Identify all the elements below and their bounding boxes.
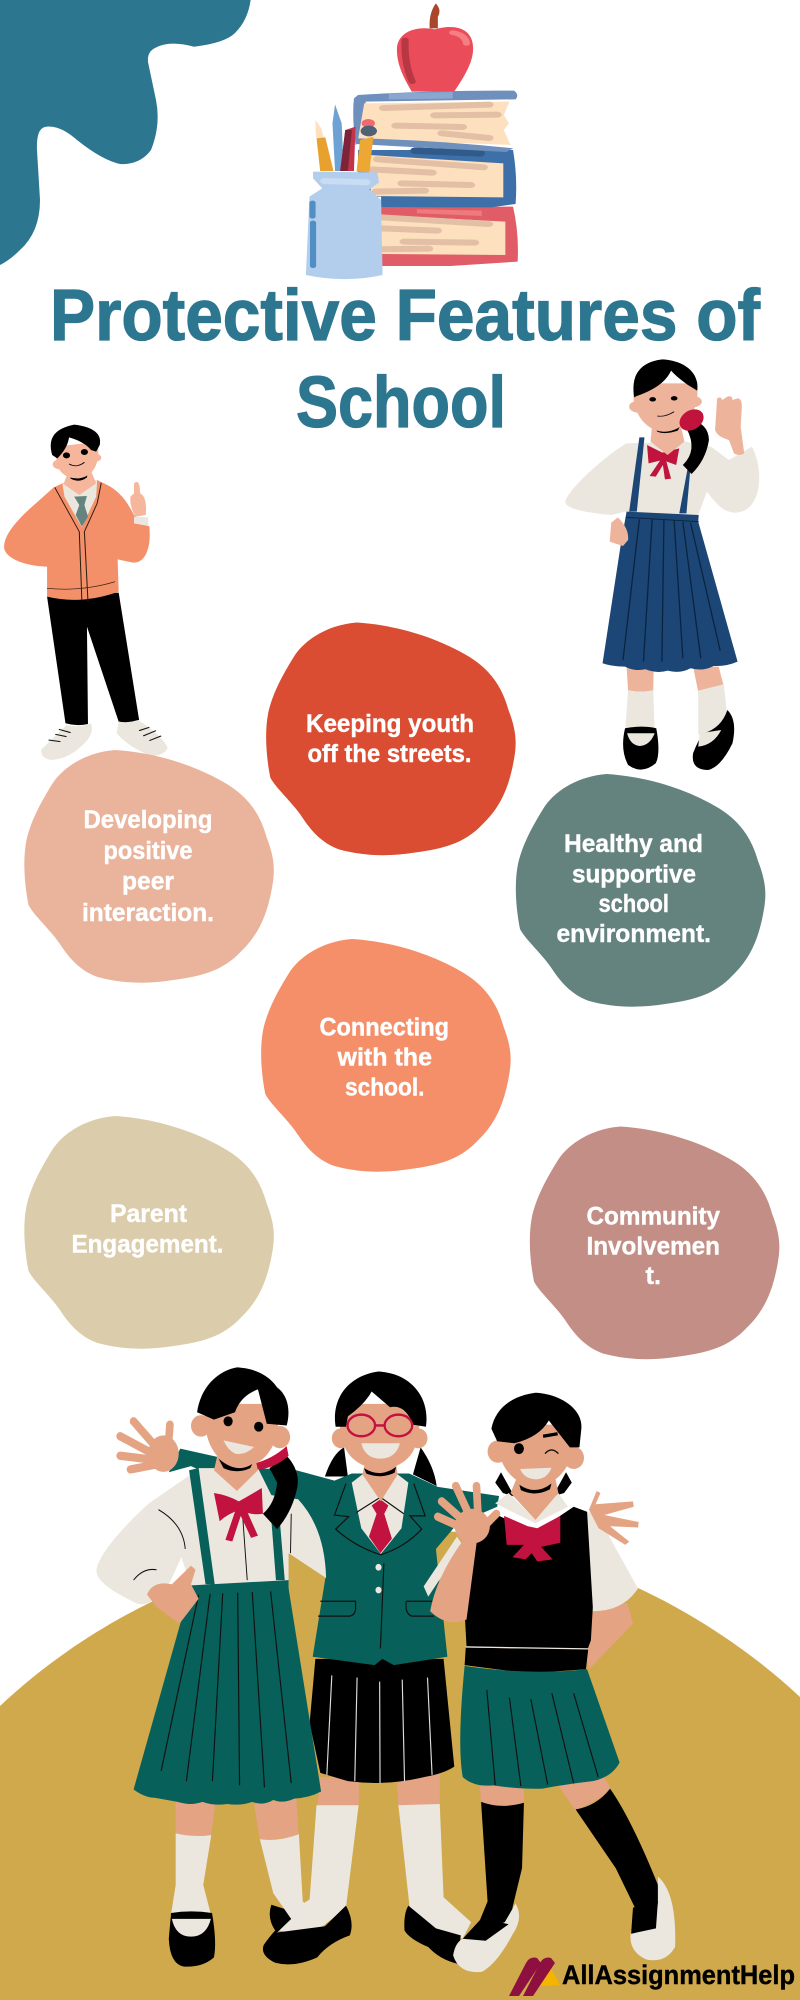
blob: community involvement xyxy=(530,1126,779,1359)
boy shirt and tie xyxy=(62,480,97,527)
title: Protective Features of xyxy=(50,276,761,356)
blob: community involvement: Community xyxy=(586,1202,720,1230)
icon: pencils xyxy=(316,104,377,172)
illustration: girl in navy pinafore xyxy=(565,359,759,770)
girl ponytail xyxy=(683,420,709,474)
girl straps xyxy=(629,437,691,513)
blob: community involvement: t. xyxy=(646,1262,661,1290)
blob: developing positive peer interaction: positive xyxy=(104,837,193,865)
title: School xyxy=(296,363,506,443)
girl scrunchie xyxy=(675,407,708,433)
girl legs xyxy=(627,667,724,692)
blob: healthy and supportive school environment: environment. xyxy=(556,920,711,948)
icon: blue book xyxy=(358,150,516,207)
blob: connecting with the school xyxy=(261,939,511,1172)
blob: developing positive peer interaction xyxy=(24,750,274,983)
left student xyxy=(96,1367,326,1967)
girl bow xyxy=(647,445,679,479)
blob: community involvement: Involvemen xyxy=(586,1232,720,1260)
illustration: books, apple and pencil jar xyxy=(306,3,518,279)
blob: parent engagement xyxy=(24,1116,274,1349)
girl skirt pleats xyxy=(623,517,720,662)
icon: jar xyxy=(306,172,383,279)
blob: parent engagement: Parent xyxy=(110,1200,188,1228)
corner wave shape xyxy=(0,0,251,265)
girl socks xyxy=(625,684,727,743)
girl blouse xyxy=(565,442,759,515)
icon: red book xyxy=(381,207,518,266)
boy thumbs-up hand xyxy=(130,482,148,526)
logo mark xyxy=(509,1958,560,1996)
illustration: three students xyxy=(96,1367,675,1972)
logo: AllAssignmentHelp xyxy=(509,1958,795,1996)
icon: top book xyxy=(353,91,517,152)
girl hip hand xyxy=(610,517,628,546)
blob: connecting with the school: Connecting xyxy=(320,1014,449,1042)
blob: developing positive peer interaction: interaction. xyxy=(82,899,214,927)
boy cardigan xyxy=(4,480,150,600)
boy cardigan lines xyxy=(47,483,115,602)
girl skirt xyxy=(603,512,738,672)
blob: healthy and supportive school environment xyxy=(516,774,765,1007)
blob: developing positive peer interaction: peer xyxy=(122,868,174,896)
title xyxy=(50,276,761,443)
girl head xyxy=(629,359,702,455)
boy head xyxy=(51,425,101,495)
blob: healthy and supportive school environment: Healthy and xyxy=(564,830,703,858)
girl shoes xyxy=(623,710,734,770)
blob: connecting with the school: school. xyxy=(345,1074,424,1102)
icon: apple xyxy=(397,3,473,92)
blob: connecting with the school: with the xyxy=(336,1044,432,1072)
blob: healthy and supportive school environment: school xyxy=(598,890,669,918)
right student xyxy=(424,1393,675,1972)
blob: developing positive peer interaction: Developing xyxy=(84,806,212,834)
illustration: boy in orange cardigan xyxy=(4,425,168,760)
blob: parent engagement: Engagement. xyxy=(72,1230,224,1258)
golden hill background xyxy=(0,1530,800,2000)
left student's waving hand xyxy=(120,1421,179,1472)
girl waving hand xyxy=(715,396,744,455)
blob: keeping youth off the streets xyxy=(266,622,516,855)
middle student xyxy=(169,1372,499,1964)
blob: healthy and supportive school environment: supportive xyxy=(572,860,696,888)
boy trousers xyxy=(47,593,139,725)
boy shoes xyxy=(41,720,168,760)
blob: keeping youth off the streets: off the streets. xyxy=(308,740,472,768)
blob: keeping youth off the streets: Keeping youth xyxy=(306,710,474,738)
